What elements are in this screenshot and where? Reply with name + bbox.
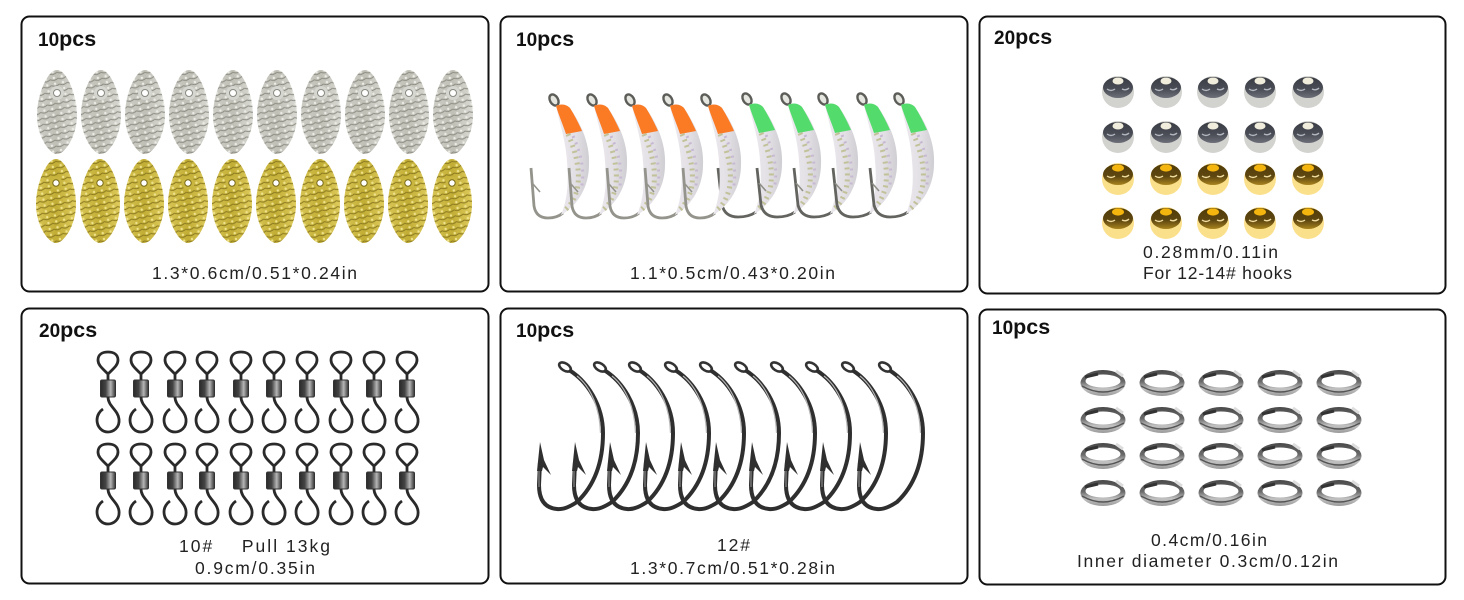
heading: 20pcs: 20pcs xyxy=(994,25,1052,49)
panel: beads xyxy=(980,16,1446,294)
split rings grid xyxy=(1080,370,1362,506)
caption: worm hook size: 1.1*0.5cm/0.43*0.20in xyxy=(630,263,835,283)
caption: ring size xyxy=(1077,530,1338,571)
panel: curved hooks xyxy=(500,308,968,584)
caption: bead size: For 12-14# hooks xyxy=(1143,263,1292,283)
silver spinner blades row xyxy=(37,70,473,154)
caption: hook size: 1.3*0.7cm/0.51*0.28in xyxy=(630,558,835,578)
caption: bead size: 0.28mm/0.11in xyxy=(1143,242,1278,262)
gold beads xyxy=(1102,163,1324,239)
heading: 10pcs: 10pcs xyxy=(516,318,574,342)
caption: bead size xyxy=(1143,242,1292,283)
caption: ring size: Inner diameter 0.3cm/0.12in xyxy=(1077,551,1338,571)
heading: 20pcs: 20pcs xyxy=(39,318,97,342)
heading: 10pcs: 10pcs xyxy=(38,27,96,51)
caption: swivel size: 0.9cm/0.35in xyxy=(195,558,315,578)
silver beads xyxy=(1102,76,1324,153)
caption: ring size: 0.4cm/0.16in xyxy=(1151,530,1267,550)
swivels rows xyxy=(97,352,418,524)
caption: hook size xyxy=(630,535,835,578)
panel: worm hooks xyxy=(500,16,968,292)
gold spinner blades row xyxy=(36,159,472,243)
caption: hook size: 12# xyxy=(717,535,750,555)
caption: blade size: 1.3*0.6cm/0.51*0.24in xyxy=(152,263,357,283)
caption: swivel size xyxy=(179,536,330,578)
heading: 10pcs: 10pcs xyxy=(992,315,1050,339)
curved hooks row xyxy=(537,361,923,509)
caption: swivel size: 10# Pull 13kg xyxy=(179,536,330,556)
panel: split rings xyxy=(980,310,1446,584)
panel: swivels xyxy=(22,308,488,584)
heading: 10pcs: 10pcs xyxy=(516,27,574,51)
orange and green worm hooks xyxy=(531,92,934,218)
panel: spinner blades xyxy=(22,16,488,292)
